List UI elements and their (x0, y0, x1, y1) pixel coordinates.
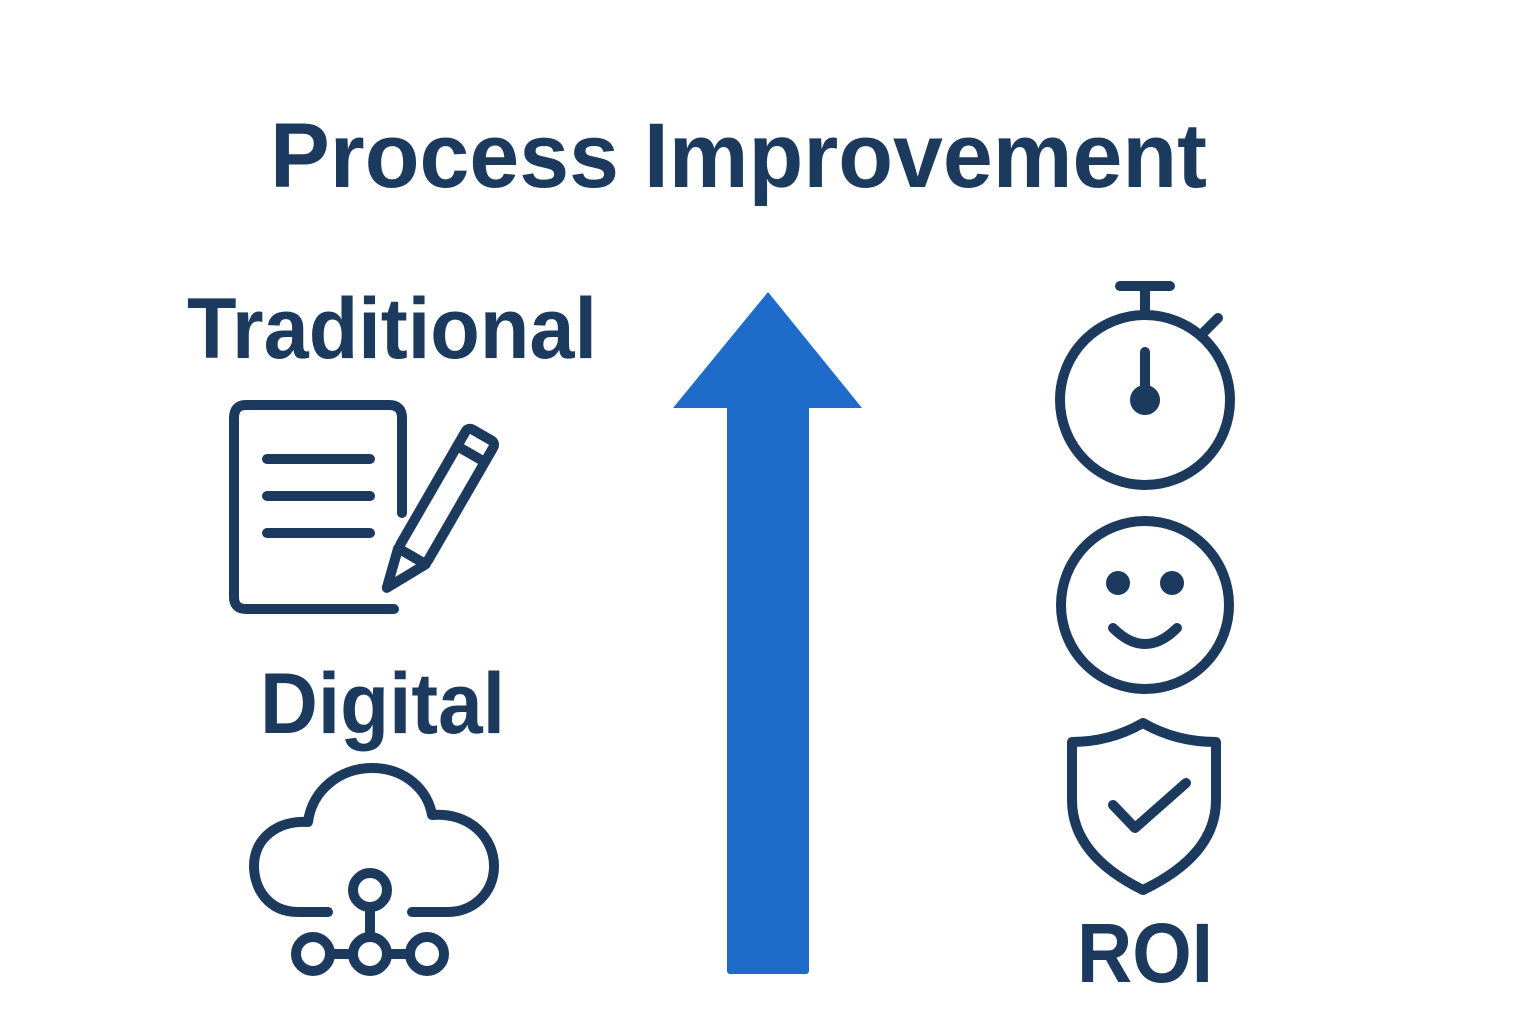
icon: smiley (1061, 521, 1229, 689)
label: Digital: Digital (260, 656, 505, 752)
icon: shield check (1072, 723, 1216, 890)
title: Process Improvement (270, 105, 1207, 207)
icon: document with pencil (234, 405, 496, 609)
label: ROI: ROI (1077, 906, 1213, 1000)
arrow: upward (673, 292, 862, 974)
icon: cloud network (254, 768, 494, 971)
icon: stopwatch (1060, 286, 1230, 485)
label: Traditional: Traditional (187, 281, 597, 377)
